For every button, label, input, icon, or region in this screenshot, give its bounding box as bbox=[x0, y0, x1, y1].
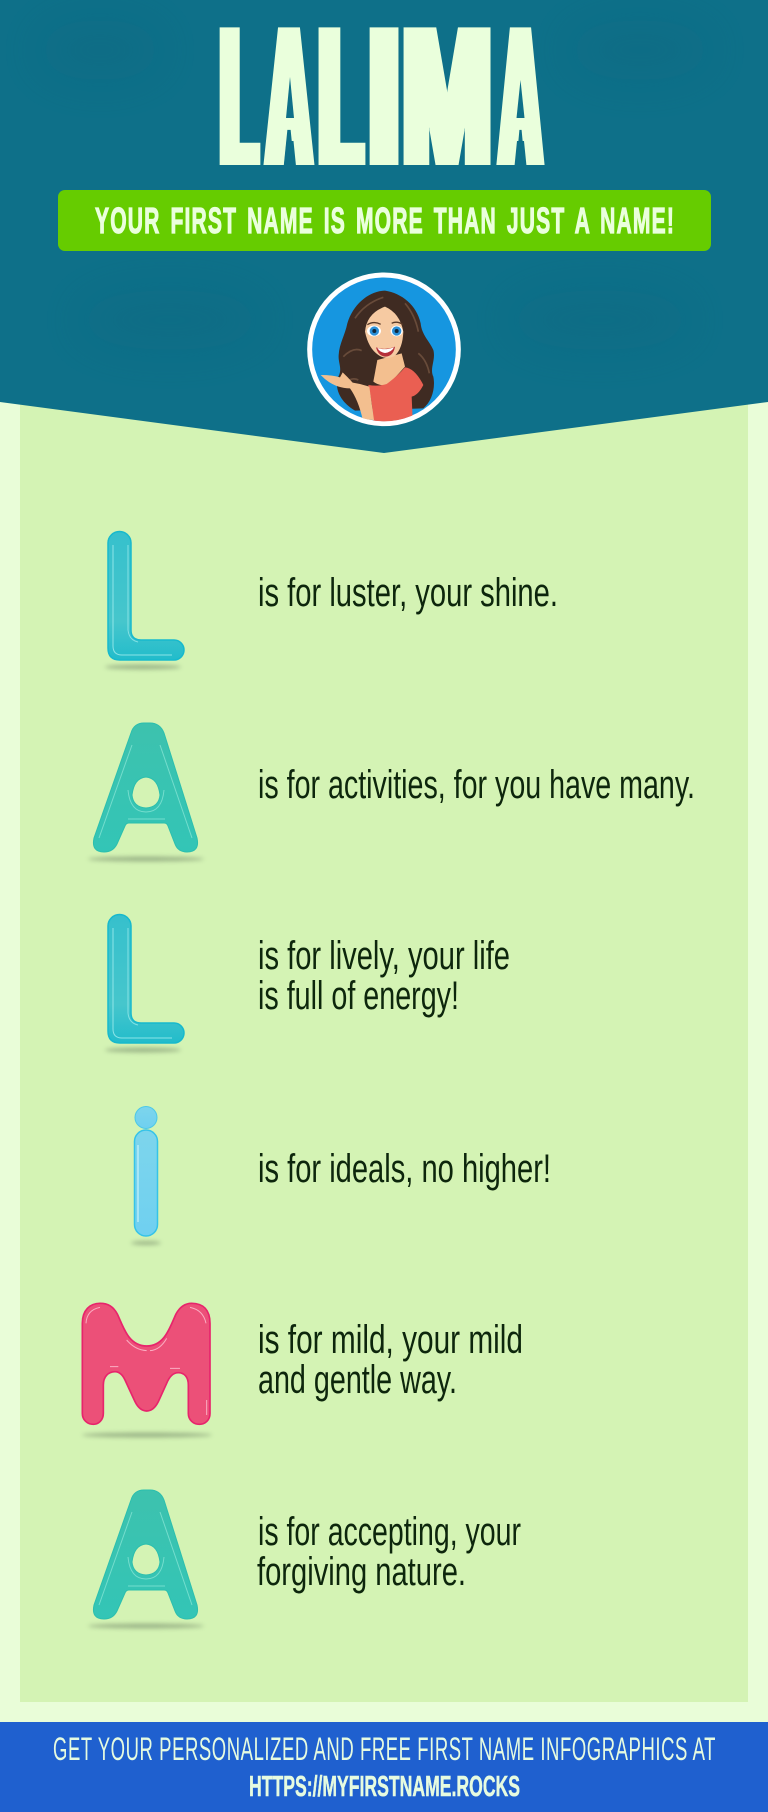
row 6: text: is for accepting, your bbox=[258, 1510, 521, 1554]
row 3: text: is full of energy! bbox=[258, 974, 459, 1018]
subtitle banner bbox=[58, 190, 711, 251]
row 3: letter L bbox=[105, 914, 184, 1052]
header banner bbox=[0, 0, 768, 453]
row 6: letter A bbox=[88, 1490, 204, 1628]
avatar: woman in circle bbox=[310, 275, 458, 430]
row 5: text: and gentle way. bbox=[258, 1358, 457, 1402]
row 1: letter L bbox=[105, 532, 184, 670]
footer url: HTTPS://MYFIRSTNAME.ROCKS bbox=[249, 1771, 520, 1803]
row 6: text: forgiving nature. bbox=[257, 1550, 466, 1594]
row 1: text: is for luster, your shine. bbox=[258, 571, 558, 615]
row 4: text: is for ideals, no higher! bbox=[258, 1147, 551, 1191]
row 3: text bbox=[258, 934, 510, 1018]
row 4: letter i bbox=[131, 1106, 161, 1245]
row 6: text bbox=[257, 1510, 521, 1594]
row 5: text bbox=[258, 1318, 523, 1402]
title bbox=[222, 0, 540, 208]
row 5: letter M bbox=[82, 1303, 212, 1438]
row 3: text: is for lively, your life bbox=[258, 934, 510, 978]
row 2: letter A bbox=[88, 723, 204, 862]
row 5: text: is for mild, your mild bbox=[258, 1318, 523, 1362]
panel: letters background bbox=[20, 380, 748, 1702]
footer bar bbox=[0, 1722, 768, 1812]
